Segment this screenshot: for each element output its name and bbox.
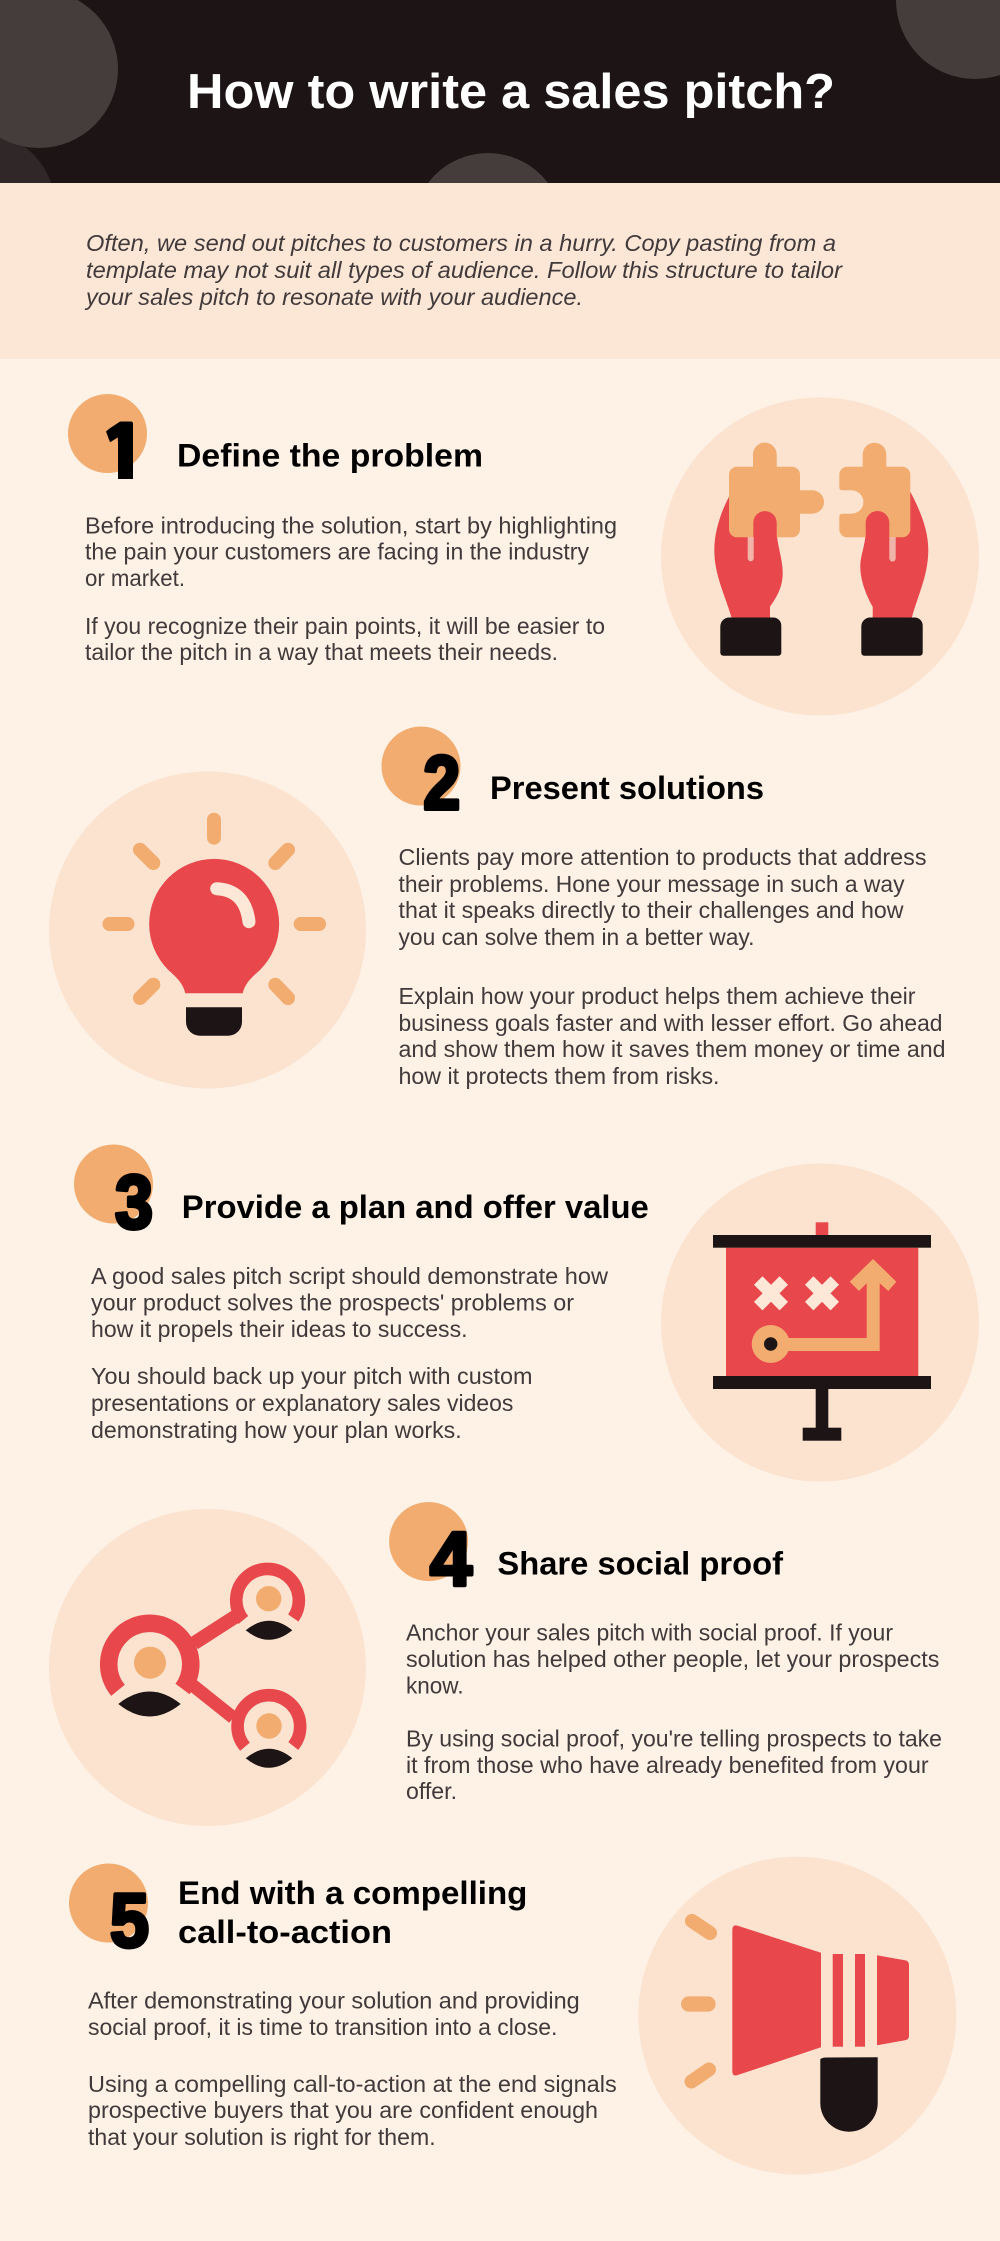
body text 3: presentations or explanatory sales videos — [91, 1390, 513, 1416]
body text 4: solution has helped other people, let your prospects — [406, 1646, 939, 1672]
body text 5: that your solution is right for them. — [88, 2124, 436, 2150]
body text 5: After demonstrating your solution and providing — [88, 1988, 580, 2014]
body text 4: it from those who have already benefited from your — [406, 1752, 929, 1778]
number badge 1 — [68, 394, 147, 479]
body text 3 — [91, 1263, 608, 1443]
heading 4: Share social proof — [497, 1546, 783, 1582]
body text 1: Before introducing the solution, start by highlighting — [85, 512, 617, 538]
number badge 5 — [69, 1864, 149, 1964]
body text 3: A good sales pitch script should demonstrate how — [91, 1263, 608, 1289]
icon: presentation board — [661, 1164, 979, 1482]
number badge 2: 2 — [423, 741, 460, 826]
number badge 1: 1 — [103, 408, 145, 494]
body text 5 — [88, 1988, 617, 2150]
header banner — [0, 0, 1000, 183]
number badge 5: 5 — [110, 1879, 149, 1964]
body text 1 — [85, 512, 617, 665]
body text 2: you can solve them in a better way. — [398, 924, 754, 950]
body text 3: how it propels their ideas to success. — [91, 1316, 468, 1342]
number badge 3: 3 — [115, 1160, 153, 1245]
number badge 2 — [382, 726, 460, 826]
section 1: define the problem — [68, 394, 979, 716]
body text 5: prospective buyers that you are confident enough — [88, 2097, 598, 2123]
icon: hands with puzzle pieces — [661, 398, 979, 716]
icon: megaphone — [638, 1857, 956, 2175]
body text 1: the pain your customers are facing in the industry — [85, 538, 589, 564]
body text 5: social proof, it is time to transition into a close. — [88, 2014, 557, 2040]
body text 2: Explain how your product helps them achieve their — [398, 983, 916, 1009]
heading 3: Provide a plan and offer value — [182, 1189, 649, 1225]
body text 5: Using a compelling call-to-action at the end signals — [88, 2071, 617, 2097]
body text 1: or market. — [85, 565, 185, 591]
section 3: provide a plan and offer value — [74, 1144, 979, 1482]
heading 2: Present solutions — [490, 770, 764, 806]
body text 2: that it speaks directly to their challenges and how — [398, 897, 904, 923]
number badge 3 — [74, 1144, 153, 1245]
title: How to write a sales pitch? — [187, 65, 835, 119]
heading 5: End with a compelling — [178, 1875, 527, 1911]
heading 5: call-to-action — [178, 1914, 392, 1950]
body text 4: offer. — [406, 1778, 457, 1804]
body text 2: and show them how it saves them money or time and — [398, 1036, 946, 1062]
section 5: end with a compelling call-to-action — [69, 1857, 956, 2175]
body text 2: Clients pay more attention to products that address — [398, 844, 926, 870]
section 2: present solutions — [49, 726, 946, 1089]
icon: shared network of people — [49, 1509, 366, 1826]
body text 2: how it protects them from risks. — [398, 1063, 720, 1089]
heading 5 — [178, 1875, 527, 1950]
body text 2: their problems. Hone your message in such a way — [398, 871, 905, 897]
body text 1: tailor the pitch in a way that meets their needs. — [85, 639, 558, 665]
body text 4: know. — [406, 1673, 464, 1699]
intro text — [84, 230, 843, 310]
section 4: share social proof — [49, 1502, 942, 1826]
body text 3: your product solves the prospects' problems or — [91, 1290, 574, 1316]
intro text: Often, we send out pitches to customers in a hurry. Copy pasting from a — [86, 230, 836, 256]
body text 4: By using social proof, you're telling prospects to take — [406, 1726, 942, 1752]
body text 1: If you recognize their pain points, it will be easier to — [85, 613, 605, 639]
number badge 4 — [389, 1502, 472, 1602]
intro band — [0, 183, 1000, 359]
body text 3: You should back up your pitch with custom — [91, 1363, 532, 1389]
heading 1: Define the problem — [177, 438, 483, 474]
body text 2 — [398, 844, 946, 1089]
icon: light bulb — [49, 772, 366, 1088]
intro text: your sales pitch to resonate with your audience. — [84, 284, 583, 310]
body text 4: Anchor your sales pitch with social proof. If your — [406, 1620, 893, 1646]
body text 3: demonstrating how your plan works. — [91, 1417, 462, 1443]
body text 2: business goals faster and with lesser effort. Go ahead — [398, 1010, 942, 1036]
body text 4 — [406, 1620, 942, 1804]
number badge 4: 4 — [430, 1517, 472, 1602]
intro text: template may not suit all types of audience. Follow this structure to tailor — [86, 257, 843, 283]
